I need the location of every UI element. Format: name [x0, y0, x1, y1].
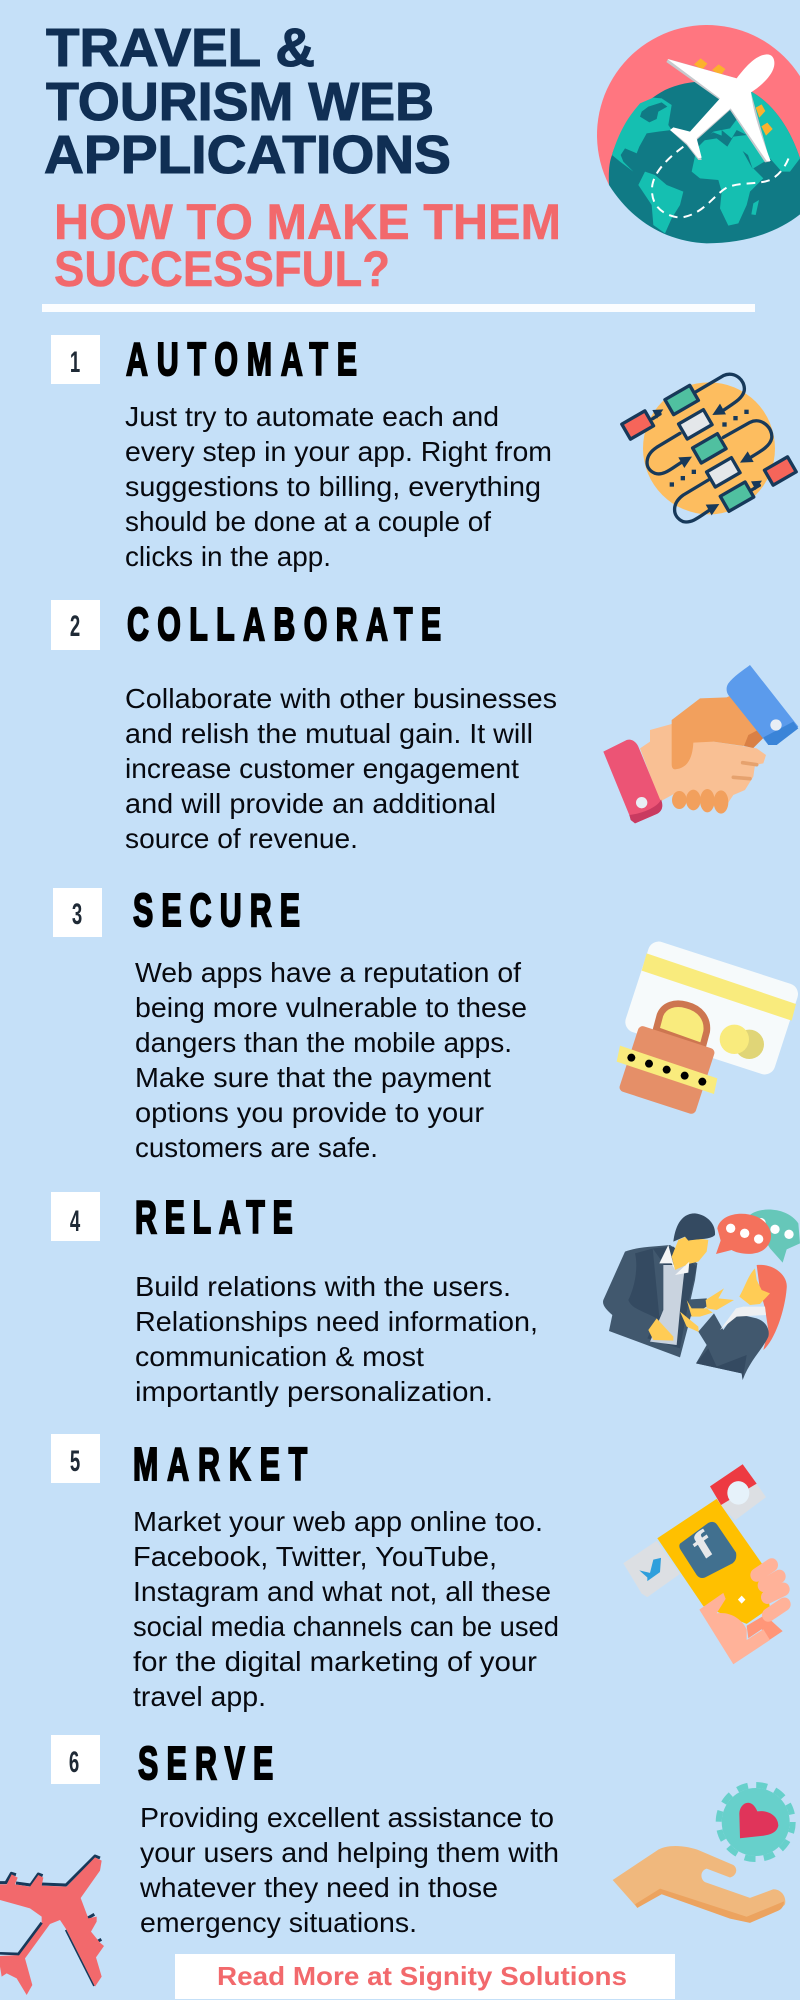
text: market body: Instagram and what not, all these [133, 1576, 551, 1607]
text: relate body: Relationships need information, [135, 1306, 538, 1337]
icon: phone with social media: f [685, 1522, 721, 1568]
panel: collaborate [51, 600, 798, 854]
number badge 3 [53, 888, 102, 937]
panel: serve [51, 1735, 793, 1938]
panel: secure [53, 886, 800, 1163]
text: secure body: being more vulnerable to these [135, 992, 527, 1023]
text: serve body: emergency situations. [140, 1907, 417, 1938]
number badge 4 [51, 1192, 100, 1241]
heading: automate: AUTOMATE [126, 335, 357, 386]
text: automate body: every step in your app. Right from [125, 436, 552, 467]
text: market body [133, 1506, 559, 1712]
icon: phone with social media [623, 1464, 784, 1664]
text: automate body: suggestions to billing, everything [125, 471, 541, 502]
text: serve body: whatever they need in those [139, 1872, 498, 1903]
text: automate body: clicks in the app. [125, 541, 331, 572]
title [44, 18, 451, 185]
heading: relate: RELATE [135, 1193, 293, 1244]
text: serve body: Providing excellent assistance to [140, 1802, 554, 1833]
heading: collaborate: COLLABORATE [127, 600, 441, 651]
text: collaborate body [125, 683, 557, 854]
text: secure body [135, 957, 527, 1163]
text: collaborate body: increase customer engagement [125, 753, 519, 784]
icon: red airplane [0, 1856, 104, 1995]
number badge 1 [51, 335, 100, 384]
text: collaborate body: and relish the mutual gain. It will [125, 718, 533, 749]
flight path [652, 147, 790, 218]
text: serve body [139, 1802, 559, 1938]
icon: workflow diagram [622, 374, 796, 522]
text: collaborate body: Collaborate with other businesses [125, 683, 557, 714]
text: secure body: options you provide to your [135, 1097, 484, 1128]
text: market body: social media channels can be used [133, 1611, 559, 1642]
number badge 3: 3 [72, 898, 82, 931]
icon: gear and heart on hand [613, 1785, 793, 1923]
text: serve body: your users and helping them with [140, 1837, 559, 1868]
number badge 5 [51, 1434, 100, 1483]
subtitle [54, 194, 561, 297]
panel: automate [51, 335, 796, 572]
text: market body: for the digital marketing of your [133, 1646, 537, 1677]
text: relate body: communication & most [135, 1341, 424, 1372]
text: secure body: customers are safe. [135, 1132, 378, 1163]
text: automate body: Just try to automate each and [125, 401, 499, 432]
icon: credit card and padlock [617, 939, 800, 1115]
text: secure body: Web apps have a reputation of [135, 957, 521, 988]
text: automate body [125, 401, 552, 572]
title: TRAVEL & [46, 18, 315, 78]
text: relate body [135, 1271, 538, 1407]
icon: two people talking [603, 1210, 800, 1380]
text: collaborate body: and will provide an additional [125, 788, 496, 819]
subtitle: HOW TO MAKE THEM [54, 194, 561, 250]
heading: secure: SECURE [133, 886, 300, 937]
text: secure body: dangers than the mobile apps. [135, 1027, 512, 1058]
icon: globe and airplane [597, 25, 800, 243]
subtitle: SUCCESSFUL? [54, 241, 390, 297]
panel: market [51, 1434, 784, 1712]
heading: market: MARKET [133, 1440, 307, 1491]
footer button [175, 1954, 675, 1999]
title: APPLICATIONS [44, 125, 451, 185]
number badge 4: 4 [70, 1205, 80, 1238]
number badge 6: 6 [69, 1746, 79, 1779]
number badge 2 [51, 600, 100, 650]
text: relate body: importantly personalization. [135, 1376, 493, 1407]
text: automate body: should be done at a couple of [125, 506, 491, 537]
number badge 1: 1 [70, 346, 80, 379]
text: secure body: Make sure that the payment [135, 1062, 491, 1093]
text: market body: travel app. [133, 1681, 266, 1712]
icon: handshake [603, 665, 798, 823]
number badge 6 [51, 1735, 100, 1784]
number badge 5: 5 [70, 1445, 80, 1478]
text: market body: Facebook, Twitter, YouTube, [133, 1541, 497, 1572]
footer button: Read More at Signity Solutions [217, 1961, 627, 1991]
text: relate body: Build relations with the users. [135, 1271, 511, 1302]
text: market body: Market your web app online too. [133, 1506, 543, 1537]
panel: relate [51, 1192, 800, 1407]
heading: serve: SERVE [138, 1739, 273, 1790]
text: collaborate body: source of revenue. [125, 823, 358, 854]
title: TOURISM WEB [46, 72, 434, 132]
number badge 2: 2 [70, 610, 80, 643]
